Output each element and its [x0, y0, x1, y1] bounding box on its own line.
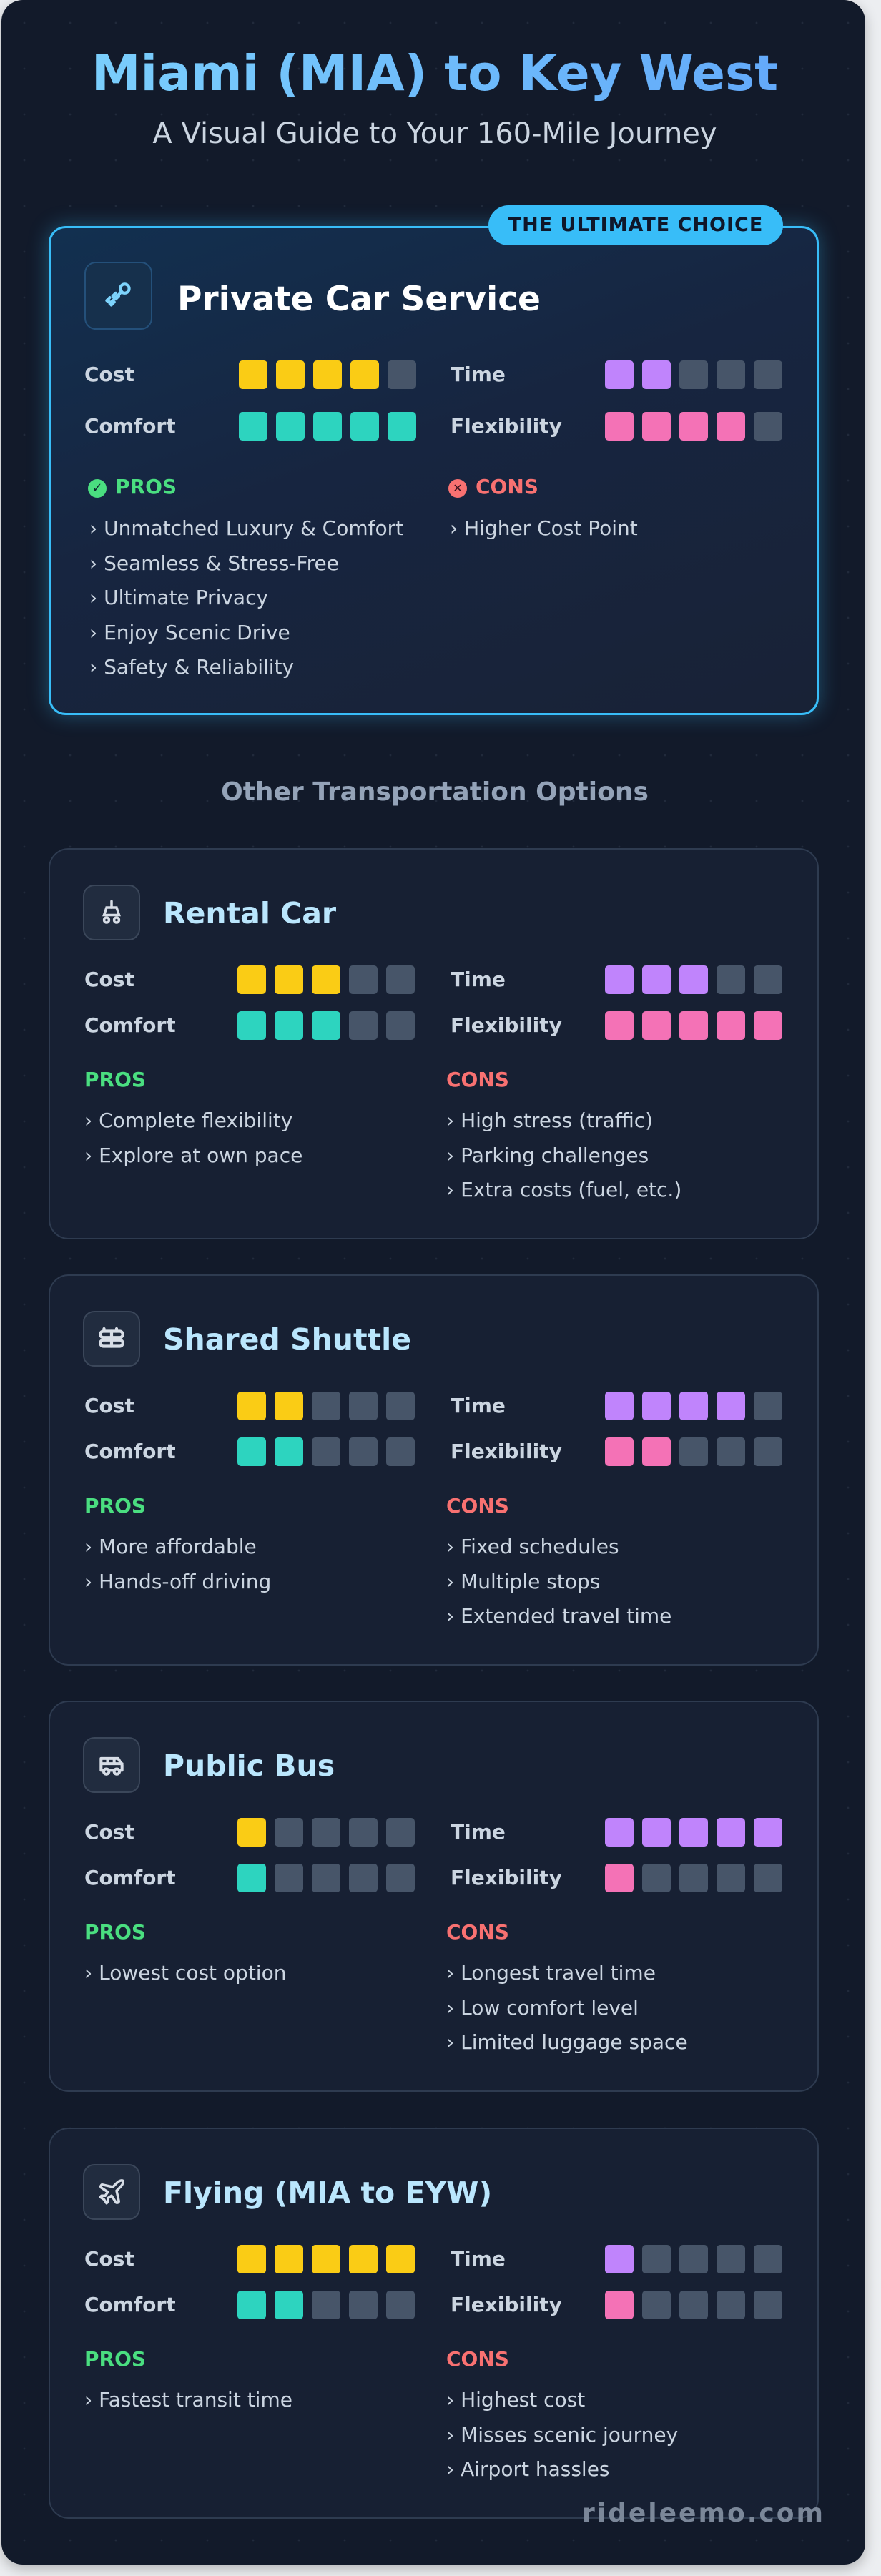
icon: plane	[83, 2164, 140, 2220]
pros heading: PROS	[84, 1494, 146, 1518]
ratings: Flexibility	[451, 1440, 562, 1463]
pros list: › Unmatched Luxury & Comfort	[89, 516, 403, 540]
icon: bus	[83, 1737, 140, 1793]
pros heading: PROS	[115, 475, 177, 498]
ratings: Comfort	[84, 1866, 176, 1889]
cons list: › Parking challenges	[446, 1143, 649, 1167]
cons list	[446, 1961, 688, 2054]
title: Miami (MIA) to Key West	[92, 45, 778, 102]
pros list	[84, 1535, 271, 1593]
ratings: Comfort	[84, 414, 176, 438]
icon: shuttle	[83, 1311, 140, 1367]
cons heading: ✕	[453, 481, 463, 495]
panel: rental car	[49, 848, 819, 1239]
ratings: Time	[451, 1394, 506, 1417]
cons list: › Longest travel time	[446, 1961, 656, 1985]
cons list: › Multiple stops	[446, 1569, 600, 1593]
pros list: › Lowest cost option	[84, 1961, 286, 1985]
cons list: › Extended travel time	[446, 1604, 671, 1628]
ratings: Cost	[84, 1394, 134, 1417]
ratings: Time	[451, 1820, 506, 1844]
pros list: › Ultimate Privacy	[89, 586, 268, 609]
pros heading: PROS	[84, 1920, 146, 1944]
cons heading: CONS	[446, 2347, 509, 2371]
pros list	[89, 516, 403, 679]
cons list: › Airport hassles	[446, 2457, 610, 2481]
cons heading: CONS	[446, 1068, 509, 1091]
subtitle: A Visual Guide to Your 160-Mile Journey	[152, 117, 717, 150]
cons list: › Limited luggage space	[446, 2030, 688, 2054]
card title: Shared Shuttle	[163, 1322, 411, 1357]
cons heading: CONS	[476, 475, 538, 498]
pros list: › Safety & Reliability	[89, 655, 294, 679]
cons list: › Highest cost	[446, 2388, 585, 2412]
panel: flying	[49, 2128, 819, 2519]
ratings	[84, 360, 782, 441]
ratings: Time	[451, 968, 506, 991]
ratings: Cost	[84, 1820, 134, 1844]
pros list: › Seamless & Stress-Free	[89, 551, 339, 575]
cons heading: CONS	[446, 1494, 509, 1518]
cons heading	[448, 475, 538, 498]
cons list	[446, 2388, 678, 2481]
ratings: Flexibility	[451, 2293, 562, 2316]
panel: public bus	[49, 1701, 819, 2092]
watermark: rideleemo.com	[582, 2499, 825, 2528]
ratings: Cost	[84, 2247, 134, 2271]
panel: private car service (featured)	[49, 226, 819, 715]
panel: shared shuttle	[49, 1274, 819, 1666]
pros heading	[88, 475, 177, 498]
cons list: › Fixed schedules	[446, 1535, 619, 1558]
cons heading: CONS	[446, 1920, 509, 1944]
cons list: › Misses scenic journey	[446, 2423, 678, 2446]
cons list: › Extra costs (fuel, etc.)	[446, 1178, 681, 1201]
card title: Rental Car	[163, 896, 336, 930]
card title: Private Car Service	[177, 280, 541, 319]
ratings: Time	[451, 363, 506, 386]
ratings: Comfort	[84, 1440, 176, 1463]
pros heading: ✓	[92, 481, 103, 496]
pros list	[84, 1108, 302, 1167]
ratings: Flexibility	[451, 414, 562, 438]
card title: Public Bus	[163, 1749, 335, 1783]
icon: car	[83, 885, 140, 940]
badge: the ultimate choice: THE ULTIMATE CHOICE	[508, 214, 763, 236]
pros heading: PROS	[84, 1068, 146, 1091]
badge: the ultimate choice	[488, 205, 783, 245]
pros list: › More affordable	[84, 1535, 257, 1558]
pros list: › Complete flexibility	[84, 1108, 292, 1132]
pros heading: PROS	[84, 2347, 146, 2371]
cons list: › Low comfort level	[446, 1995, 639, 2020]
cons list	[446, 1535, 671, 1628]
pros list: › Hands-off driving	[84, 1569, 271, 1593]
ratings	[84, 2245, 782, 2319]
card title: Flying (MIA to EYW)	[163, 2176, 492, 2210]
ratings: Comfort	[84, 1013, 176, 1037]
ratings	[84, 1392, 782, 1466]
icon: rocket	[84, 262, 152, 330]
cons list: › Higher Cost Point	[450, 516, 638, 540]
ratings: Comfort	[84, 2293, 176, 2316]
ratings: Flexibility	[451, 1866, 562, 1889]
pros list: › Enjoy Scenic Drive	[89, 621, 290, 644]
ratings: Cost	[84, 363, 134, 386]
pros list: › Explore at own pace	[84, 1143, 302, 1167]
ratings: Time	[451, 2247, 506, 2271]
ratings: Cost	[84, 968, 134, 991]
ratings	[84, 1818, 782, 1892]
cons list: › High stress (traffic)	[446, 1108, 653, 1132]
pros list: › Fastest transit time	[84, 2388, 292, 2412]
ratings	[84, 965, 782, 1040]
ratings: Flexibility	[451, 1013, 562, 1037]
section heading: Other Transportation Options	[221, 777, 649, 807]
cons list	[446, 1108, 681, 1201]
